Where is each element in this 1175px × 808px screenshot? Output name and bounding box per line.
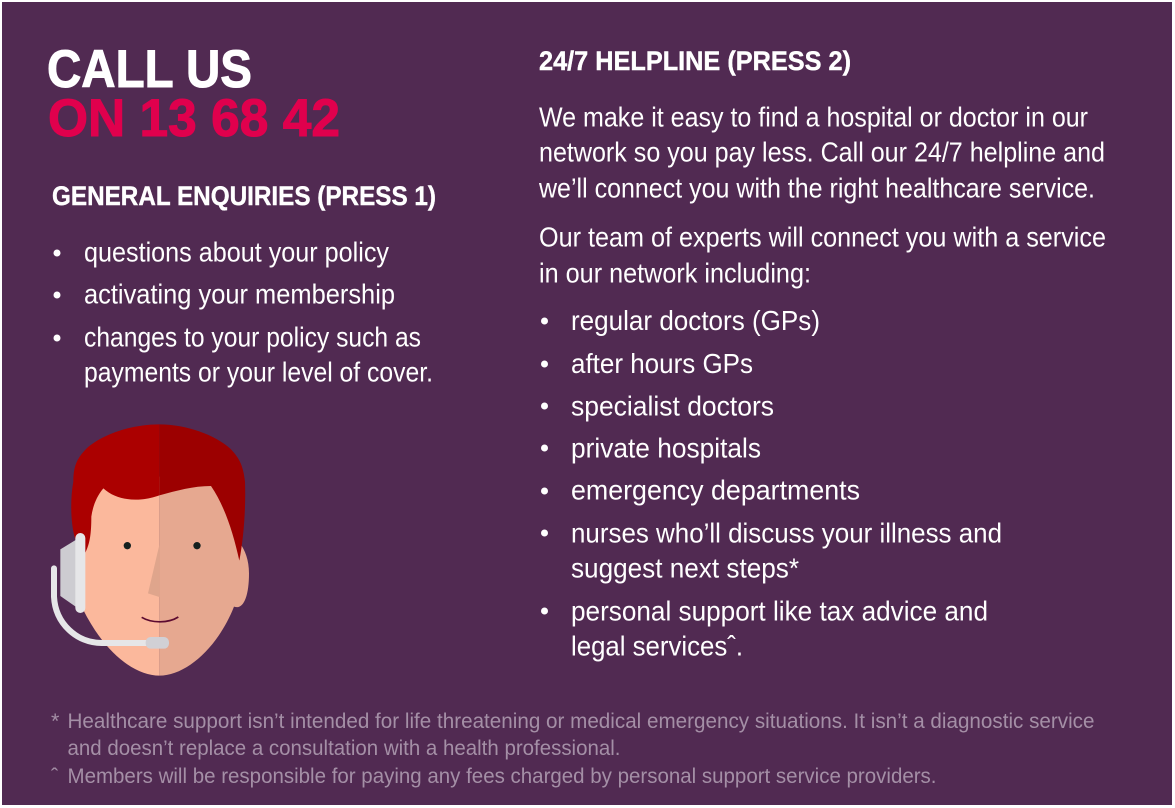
- text block: helpline intro: Our team of experts will connect you with a service: [539, 222, 1106, 252]
- footnotes: Members will be responsible for paying any fees charged by personal support service providers.: [68, 764, 936, 788]
- text block: helpline intro: in our network including:: [539, 258, 811, 288]
- footnotes: Healthcare support isn’t intended for life threatening or medical emergency situations. It isn’t a diagnostic service: [68, 709, 1094, 733]
- list: helpline services: specialist doctors: [571, 390, 774, 422]
- list: helpline services: emergency departments: [571, 474, 860, 506]
- list: general enquiries: [54, 236, 433, 388]
- list: helpline services: personal support like tax advice and: [571, 596, 988, 626]
- footnotes: *: [51, 709, 60, 733]
- title: CALL US: [47, 40, 252, 99]
- text block: helpline intro: network so you pay less. Call our 24/7 helpline and: [539, 136, 1105, 168]
- list: helpline services: legal servicesˆ.: [571, 630, 743, 662]
- title: [47, 40, 340, 148]
- list: general enquiries: payments or your level of cover.: [84, 356, 433, 388]
- title: ON 13 68 42: [48, 89, 340, 148]
- text block: helpline intro: we’ll connect you with the right healthcare service.: [538, 172, 1095, 204]
- list: helpline services: private hospitals: [571, 432, 761, 464]
- text block: helpline intro: [538, 102, 1106, 288]
- list: helpline services: after hours GPs: [571, 348, 753, 379]
- list: general enquiries: questions about your policy: [84, 236, 389, 268]
- list: general enquiries: changes to your policy such as: [84, 322, 421, 352]
- list: helpline services: nurses who’ll discuss your illness and: [571, 518, 1002, 548]
- list: helpline services: regular doctors (GPs): [571, 305, 820, 336]
- list: helpline services: [541, 305, 1002, 662]
- heading: helpline: 24/7 HELPLINE (PRESS 2): [539, 46, 851, 76]
- icon: call centre agent face with headset: [54, 424, 249, 676]
- heading: general enquiries: GENERAL ENQUIRIES (PRESS 1): [52, 181, 436, 211]
- list: helpline services: suggest next steps*: [571, 552, 799, 584]
- footnotes: ˆ: [51, 764, 58, 788]
- list: general enquiries: activating your membership: [84, 278, 395, 310]
- footnotes: [51, 709, 1094, 788]
- text block: helpline intro: We make it easy to find a hospital or doctor in our: [539, 102, 1088, 132]
- footnotes: and doesn’t replace a consultation with a health professional.: [68, 736, 620, 760]
